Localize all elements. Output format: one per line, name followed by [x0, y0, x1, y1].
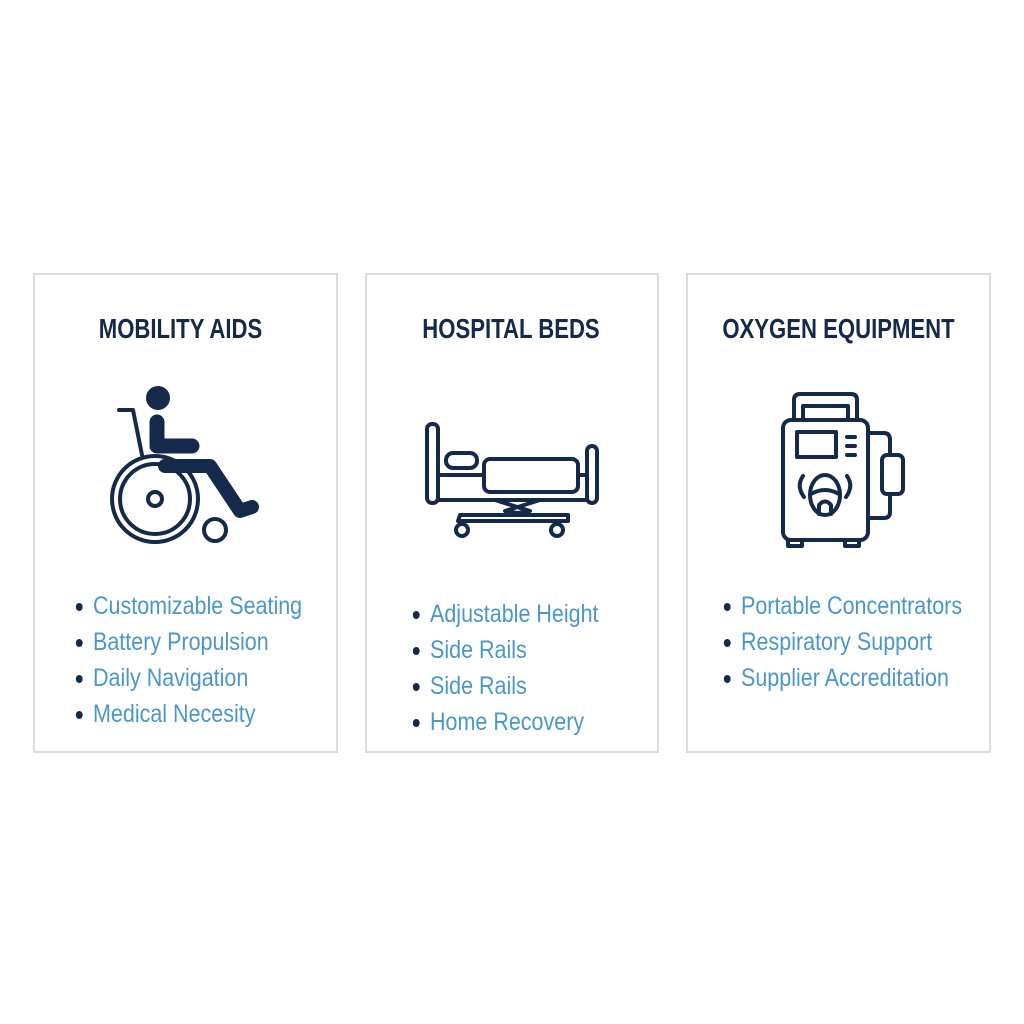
title: mobility aids: MOBILITY AIDS: [99, 313, 262, 344]
title: oxygen equipment: OXYGEN EQUIPMENT: [722, 313, 955, 344]
list: mobility aids features: [76, 592, 302, 728]
list: hospital beds features: Adjustable Height: [430, 600, 599, 628]
list: mobility aids features: Medical Necesity: [93, 700, 255, 728]
list: oxygen equipment features: Respiratory Support: [741, 628, 932, 656]
list: oxygen equipment features: Supplier Accreditation: [741, 664, 949, 692]
list: hospital beds features: [412, 600, 599, 736]
list: hospital beds features: Side Rails: [430, 636, 527, 664]
list: oxygen equipment features: Portable Concentrators: [741, 592, 962, 620]
list: mobility aids features: Customizable Seating: [93, 592, 302, 620]
list: mobility aids features: Daily Navigation: [93, 664, 248, 692]
panel: hospital beds: [365, 273, 659, 753]
panel: mobility aids: [33, 273, 338, 753]
list: hospital beds features: Home Recovery: [430, 708, 584, 736]
panel: oxygen equipment: [686, 273, 991, 753]
list: mobility aids features: Battery Propulsion: [93, 628, 269, 656]
list: oxygen equipment features: [724, 592, 962, 692]
list: hospital beds features: Side Rails: [430, 672, 527, 700]
title: hospital beds: HOSPITAL BEDS: [422, 313, 600, 344]
